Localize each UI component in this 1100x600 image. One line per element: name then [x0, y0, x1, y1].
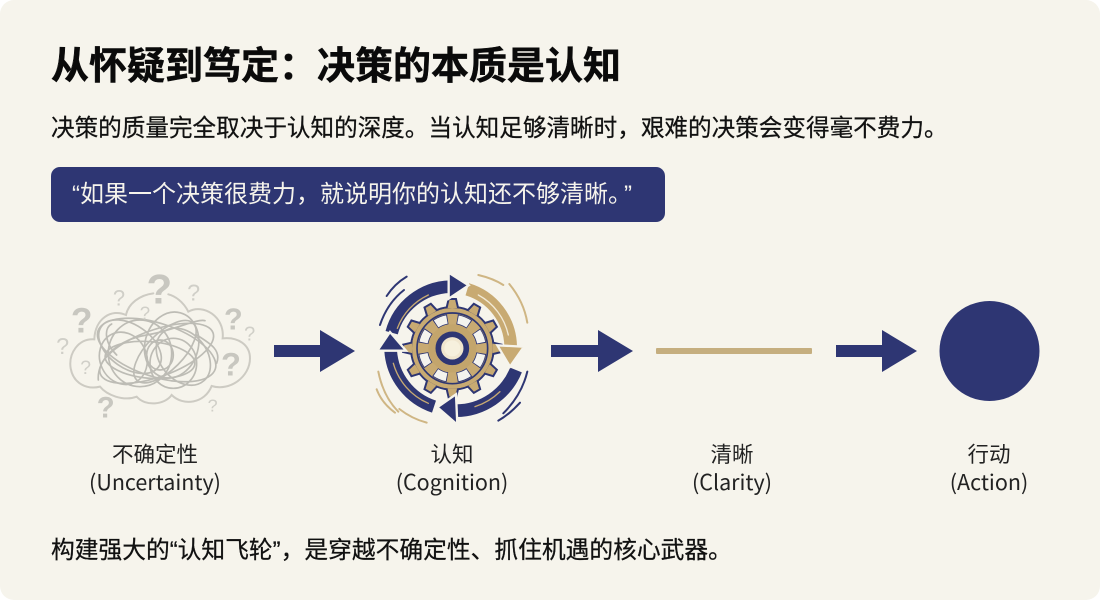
label: cognition: 认知	[430, 438, 474, 469]
arrow: uncertainty to cognition	[274, 330, 355, 372]
clarity line	[656, 348, 812, 354]
quote banner	[51, 167, 665, 222]
icon: tangled cloud of uncertainty: ?	[56, 333, 69, 359]
label: cognition: (Cognition)	[396, 466, 508, 497]
arrow: cognition to clarity	[551, 330, 633, 372]
icon: tangled cloud of uncertainty: ?	[187, 280, 200, 306]
icon: tangled cloud of uncertainty: ?	[80, 358, 91, 379]
label: cognition	[396, 438, 508, 497]
icon: tangled cloud of uncertainty: ?	[244, 324, 255, 346]
icon: tangled cloud of uncertainty: ?	[113, 285, 125, 310]
icon: tangled cloud of uncertainty: ?	[224, 302, 243, 336]
label: clarity: (Clarity)	[692, 466, 772, 497]
icon: tangled cloud of uncertainty	[56, 265, 255, 424]
arrow: clarity to action	[836, 330, 917, 372]
gear	[403, 299, 502, 398]
label: uncertainty	[89, 438, 221, 497]
closing statement: 构建强大的“认知飞轮”，是穿越不确定性、抓住机遇的核心武器。	[51, 537, 732, 564]
icon: tangled cloud of uncertainty: ?	[97, 391, 115, 424]
label: clarity: 清晰	[710, 438, 754, 469]
icon: tangled cloud of uncertainty: ?	[71, 302, 92, 341]
label: action	[950, 438, 1028, 497]
label: action: 行动	[967, 438, 1010, 469]
action circle	[940, 301, 1040, 401]
label: action: (Action)	[950, 466, 1028, 497]
icon: tangled cloud of uncertainty: ?	[140, 302, 150, 323]
label: uncertainty: 不确定性	[112, 438, 198, 469]
quote banner: “如果一个决策很费力，就说明你的认知还不够清晰。”	[72, 181, 632, 208]
label: uncertainty: (Uncertainty)	[89, 466, 221, 497]
subtitle: 决策的质量完全取决于认知的深度。当认知足够清晰时，艰难的决策会变得毫不费力。	[51, 116, 948, 142]
title: 从怀疑到笃定：决策的本质是认知	[51, 46, 621, 88]
icon: tangled cloud of uncertainty: ?	[208, 396, 218, 416]
label: clarity	[692, 438, 772, 497]
icon: cognition flywheel gear	[377, 273, 527, 425]
icon: tangled cloud of uncertainty: ?	[221, 345, 241, 382]
rotating arrows	[391, 287, 516, 411]
icon: tangled cloud of uncertainty: ?	[146, 265, 172, 312]
